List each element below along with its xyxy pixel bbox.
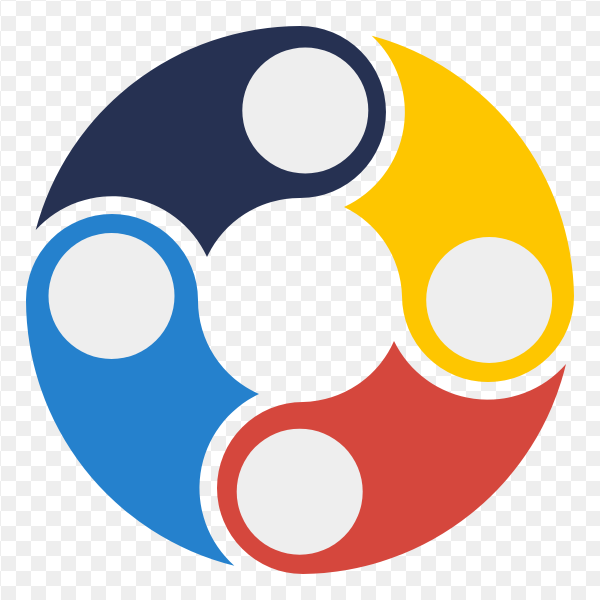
icon placeholder: navy circle bbox=[242, 48, 368, 174]
icon placeholder: red circle bbox=[237, 429, 363, 555]
panel: blue segment bbox=[26, 214, 259, 566]
panel: yellow segment bbox=[344, 36, 574, 382]
panel: navy segment bbox=[36, 26, 386, 257]
icon placeholder: yellow circle bbox=[426, 237, 552, 363]
icon placeholder: blue circle bbox=[48, 233, 174, 359]
panel: red segment bbox=[217, 341, 566, 574]
